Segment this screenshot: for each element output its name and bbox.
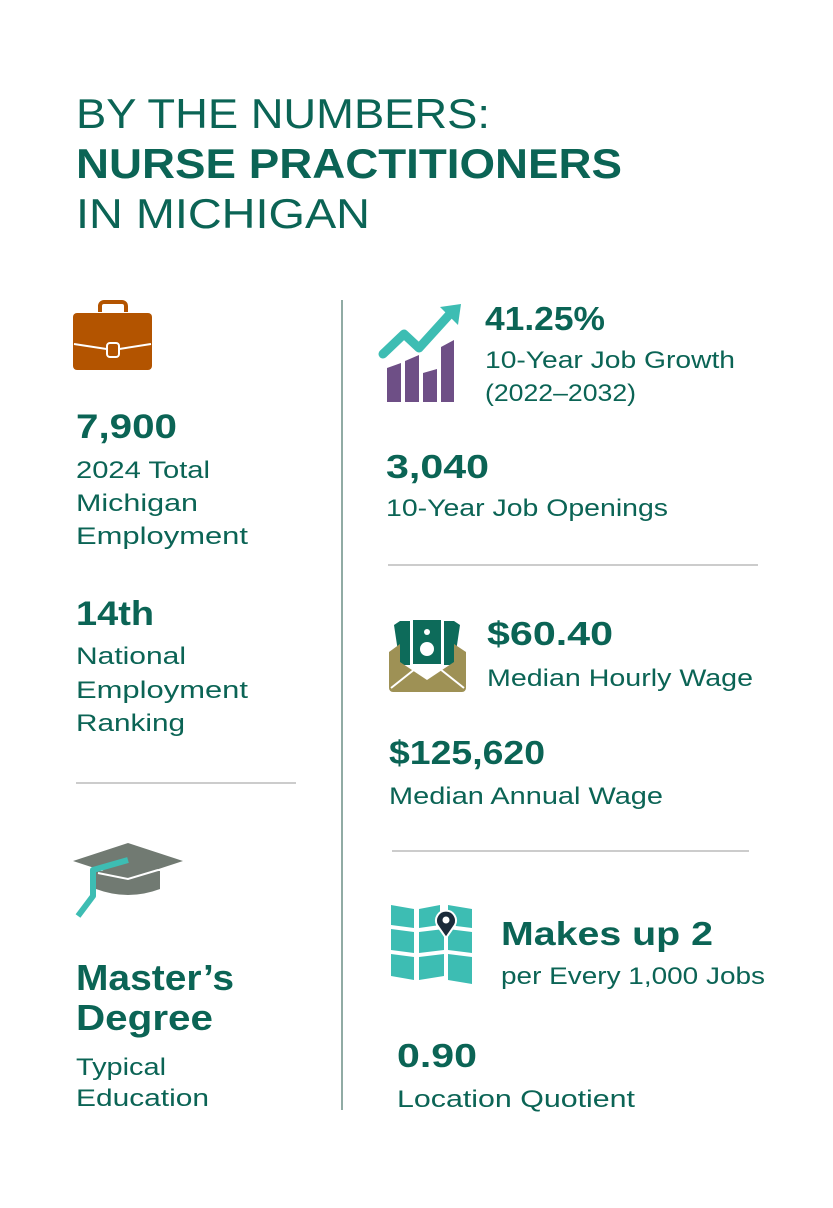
stat: education: Education bbox=[76, 1085, 209, 1112]
icon: map with pin bbox=[391, 905, 472, 984]
title: BY THE NUMBERS: bbox=[76, 90, 490, 137]
stat: job openings: 3,040 bbox=[386, 448, 489, 485]
stat: annual wage bbox=[389, 734, 663, 810]
stat: jobs per 1000: Makes up 2 bbox=[501, 915, 713, 952]
stat: annual wage: $125,620 bbox=[389, 734, 545, 771]
stat: hourly wage: $60.40 bbox=[487, 615, 613, 652]
stat: job growth bbox=[485, 300, 735, 407]
stat: job growth: 41.25% bbox=[485, 300, 605, 337]
stat: national ranking: 14th bbox=[76, 595, 154, 633]
icon: growth chart bbox=[383, 304, 461, 402]
stat: total employment: Employment bbox=[76, 523, 248, 550]
stat: hourly wage: Median Hourly Wage bbox=[487, 665, 753, 692]
stat: national ranking bbox=[76, 595, 248, 737]
stat: hourly wage bbox=[487, 615, 753, 692]
icon: money envelope bbox=[389, 618, 466, 692]
stat: education: Typical bbox=[76, 1054, 166, 1081]
title: NURSE PRACTITIONERS bbox=[76, 140, 622, 187]
stat: total employment: Michigan bbox=[76, 490, 198, 517]
stat: location quotient bbox=[397, 1037, 635, 1113]
stat: job growth: (2022–2032) bbox=[485, 380, 636, 407]
stat: education: Master’s bbox=[76, 957, 234, 998]
stat: national ranking: Employment bbox=[76, 677, 248, 704]
stat: total employment: 2024 Total bbox=[76, 457, 210, 484]
stat: job openings: 10-Year Job Openings bbox=[386, 495, 668, 522]
stat: national ranking: Ranking bbox=[76, 710, 185, 737]
stat: total employment bbox=[76, 408, 248, 550]
icon: graduation cap bbox=[73, 843, 183, 916]
stat: education: Degree bbox=[76, 997, 213, 1038]
stat: job openings bbox=[386, 448, 668, 522]
title: IN MICHIGAN bbox=[76, 190, 370, 237]
stat: total employment: 7,900 bbox=[76, 408, 177, 446]
stat: education bbox=[76, 957, 234, 1112]
stat: location quotient: 0.90 bbox=[397, 1037, 477, 1074]
title bbox=[76, 90, 622, 237]
stat: jobs per 1000: per Every 1,000 Jobs bbox=[501, 963, 765, 990]
stat: jobs per 1000 bbox=[501, 915, 765, 990]
stat: location quotient: Location Quotient bbox=[397, 1086, 635, 1113]
stat: national ranking: National bbox=[76, 643, 186, 670]
stat: annual wage: Median Annual Wage bbox=[389, 783, 663, 810]
stat: job growth: 10-Year Job Growth bbox=[485, 347, 735, 374]
icon: briefcase bbox=[73, 302, 152, 370]
